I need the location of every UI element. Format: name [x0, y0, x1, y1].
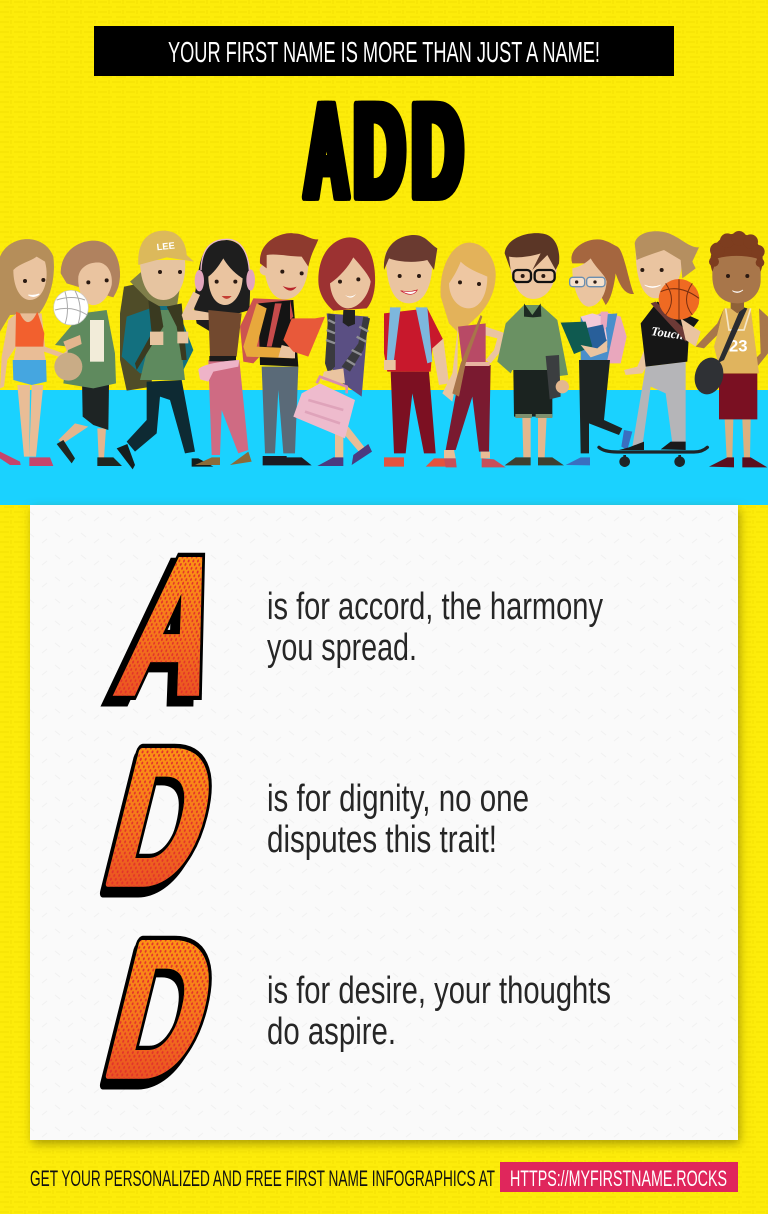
name heading: ADD: D [354, 75, 405, 226]
explanation: first D: disputes this trait! [267, 819, 497, 861]
white content panel [30, 505, 738, 1140]
name heading: ADD: D [415, 75, 466, 226]
person: boy with cap and backpack [117, 231, 213, 469]
name heading: ADD: D [357, 75, 408, 226]
person: boy with glasses and green sweater [497, 233, 569, 465]
explanation: A [267, 586, 603, 669]
comic letter A: A [96, 523, 236, 740]
explanation: A: you spread. [267, 627, 417, 669]
person: boy with cap and backpack: LEE [156, 241, 175, 252]
name heading: ADD [302, 75, 466, 227]
comic letter D: D [90, 711, 234, 923]
comic letter D second: D [90, 903, 234, 1115]
comic letter D: D [86, 717, 230, 933]
person: girl in orange top [0, 239, 80, 466]
explanation: A: is for accord, the harmony [267, 586, 603, 628]
person: boy on skateboard with basketball [599, 231, 707, 467]
comic letter D: D [90, 711, 234, 923]
title banner [94, 26, 674, 76]
name heading: ADD: A [302, 77, 345, 227]
group of cartoon people [0, 231, 768, 469]
explanation: first D: is for dignity, no one [267, 778, 529, 820]
explanation: second D: do aspire. [267, 1011, 396, 1053]
person: boy in jersey with curly hair [691, 231, 768, 467]
person: boy in red shirt [384, 235, 454, 467]
name heading: ADD: D [409, 75, 460, 226]
person: boy in jersey with curly hair: 23 [729, 337, 748, 356]
comic letter A: A [104, 521, 243, 733]
explanation: second D: is for desire, your thoughts [267, 970, 611, 1012]
person: girl with headphones [182, 239, 255, 465]
person: girl with ponytail and tablet [561, 239, 634, 465]
name heading: ADD: D [351, 75, 402, 226]
name heading: ADD: A [308, 77, 351, 227]
explanation: second D [267, 970, 611, 1053]
comic letter D: D [90, 711, 234, 923]
person: boy on skateboard with basketball: Touch [650, 324, 684, 343]
person: boy with book [240, 233, 325, 465]
name heading: ADD: D [412, 75, 463, 226]
explanation: first D [267, 778, 529, 861]
comic letter D second: D [86, 909, 230, 1125]
comic letter D second: D [90, 903, 234, 1115]
comic letter A: A [104, 521, 243, 733]
comic letter A: A [104, 521, 243, 733]
blue floor band [0, 390, 768, 505]
person: girl with red hair and pink bag [293, 237, 375, 466]
person: girl with volleyball [54, 241, 122, 466]
name heading: ADD: A [305, 77, 348, 227]
footer call to action: GET YOUR PERSONALIZED AND FREE FIRST NAME INFOGRAPHICS AT [30, 1166, 495, 1191]
comic letter D second: D [90, 903, 234, 1115]
person: blonde girl [441, 243, 506, 467]
